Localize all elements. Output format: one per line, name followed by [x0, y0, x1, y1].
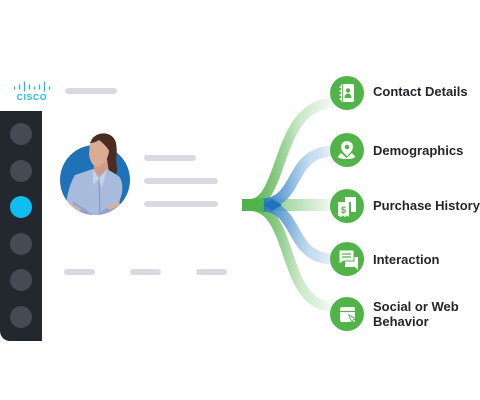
icon: chat bubbles	[330, 242, 364, 276]
panel: sidebar	[0, 111, 42, 341]
label: interaction: Interaction	[373, 252, 439, 267]
menu dot 5	[10, 269, 32, 291]
logo: cisco: CISCO	[17, 92, 47, 102]
menu dot 1	[10, 123, 32, 145]
ribbon: social or web behavior	[250, 206, 334, 307]
stat placeholder bar 2	[130, 269, 161, 275]
item: contact details	[330, 76, 364, 110]
menu dot 2	[10, 160, 32, 182]
icon: receipts	[330, 189, 364, 223]
item: interaction	[330, 242, 364, 276]
label: demographics: Demographics	[373, 143, 463, 158]
icon: receipts: $	[341, 205, 346, 215]
label: purchase history: Purchase History	[373, 198, 480, 213]
ribbon: contact details	[250, 103, 334, 204]
stat placeholder bar 1	[64, 269, 95, 275]
label: contact details: Contact Details	[373, 84, 468, 99]
label: social or web behavior: Social or Web	[373, 299, 459, 314]
item: demographics	[330, 133, 364, 167]
icon: browser cursor	[330, 297, 364, 331]
logo: cisco	[14, 81, 50, 102]
menu dot active	[10, 196, 32, 218]
menu dot 4	[10, 233, 32, 255]
header placeholder bar	[65, 88, 117, 94]
profile placeholder bar 3	[144, 201, 218, 207]
source block	[242, 199, 264, 211]
portrait: woman in blue shirt on blue circle	[60, 133, 130, 215]
blue junction	[263, 199, 282, 211]
label: social or web behavior	[373, 299, 459, 329]
stat placeholder bar 3	[196, 269, 227, 275]
item: purchase history	[330, 189, 364, 223]
ribbon: purchase history	[262, 199, 334, 211]
menu dot 6	[10, 306, 32, 328]
ribbon: demographics	[262, 151, 334, 204]
label: social or web behavior: Behavior	[373, 314, 429, 329]
ribbon: interaction	[262, 206, 334, 259]
profile placeholder bar 2	[144, 178, 218, 184]
profile placeholder bar 1	[144, 155, 196, 161]
icon: map pin	[330, 133, 364, 167]
flow diagram: ribbons from source to categories	[242, 98, 334, 312]
icon: address book	[330, 76, 364, 110]
item: social or web behavior	[330, 297, 364, 331]
